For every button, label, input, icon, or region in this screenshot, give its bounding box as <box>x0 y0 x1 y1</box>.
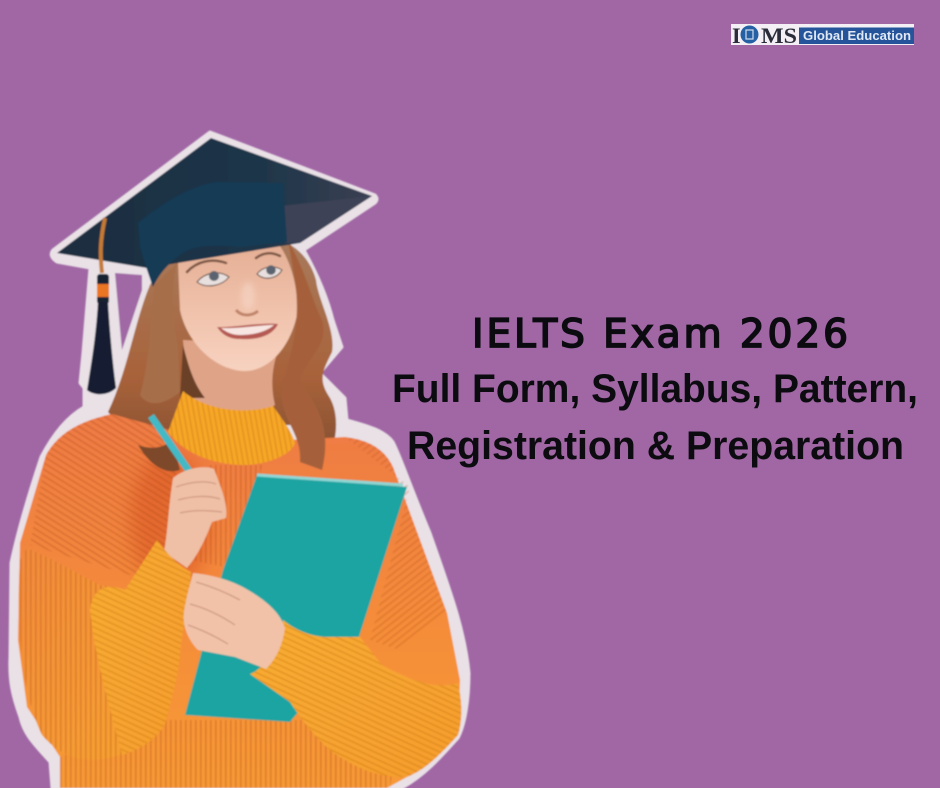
front hair left <box>140 262 180 403</box>
pen <box>151 416 189 471</box>
pen hand finger lines <box>176 482 222 513</box>
cheek shadow under nose <box>241 282 255 310</box>
book top edge <box>257 475 403 485</box>
logo: IOMS Global Education: I <box>732 23 741 48</box>
pen hand <box>164 467 226 568</box>
smile <box>217 324 278 339</box>
holding hand finger lines <box>188 582 240 644</box>
neck <box>180 340 280 415</box>
neck shadow <box>180 345 205 398</box>
sweater ribbing upper left <box>30 414 190 575</box>
logo: IOMS Global Education: Global Education <box>803 28 911 43</box>
heading: IELTS Exam 2026: IELTS Exam 2026 <box>472 312 848 357</box>
logo: IOMS Global Education <box>731 23 914 48</box>
tassel fringe <box>87 302 116 394</box>
left cuff and sleeve <box>90 540 191 755</box>
logo: IOMS Global Education: MS <box>761 23 797 48</box>
subheading line 1: Full Form, Syllabus, Pattern, <box>392 367 918 411</box>
tassel cord <box>101 218 105 273</box>
eye right <box>257 267 282 278</box>
book holding hand <box>184 573 285 669</box>
sweater body <box>18 414 460 788</box>
lower left hair strand <box>138 440 180 471</box>
sweater ribbing centre <box>60 465 400 788</box>
tassel knot <box>97 274 109 304</box>
purple gap between tassel and hair <box>115 273 142 350</box>
nose <box>236 310 258 315</box>
subheading line 2: Registration & Preparation <box>407 424 904 468</box>
collar <box>168 391 295 465</box>
cap crown <box>138 182 287 287</box>
right sleeve <box>250 620 461 777</box>
hair back <box>108 240 336 468</box>
student illustration with sticker outline <box>10 132 469 788</box>
sweater ribbing upper right <box>345 437 447 650</box>
sweater shadow upper centre <box>130 450 210 590</box>
eye left <box>197 273 229 286</box>
book <box>185 475 407 722</box>
face <box>178 244 297 371</box>
eyebrows <box>187 253 280 272</box>
left lower sleeve <box>19 548 165 760</box>
mortarboard board <box>57 138 372 268</box>
sticker outline <box>10 132 469 788</box>
title text block <box>392 312 918 468</box>
front hair right <box>282 240 325 470</box>
